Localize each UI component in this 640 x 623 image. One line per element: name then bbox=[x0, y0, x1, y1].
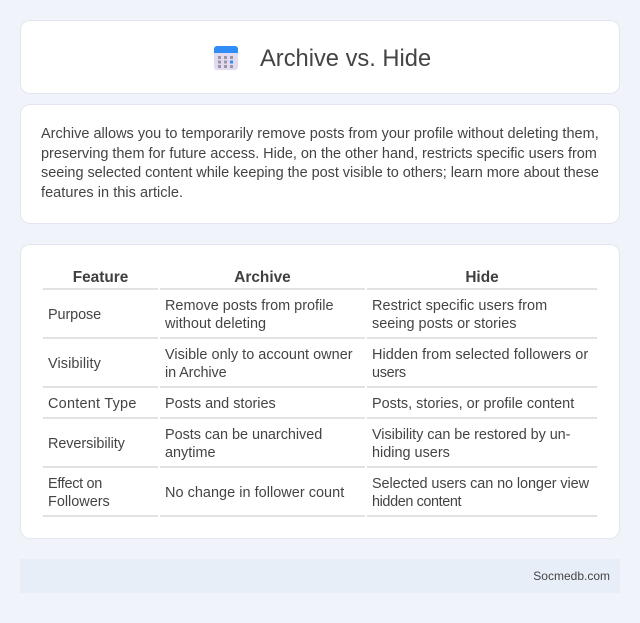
row: purpose: without deleting bbox=[165, 316, 266, 332]
table header: Archive bbox=[234, 269, 291, 286]
row: effect on followers: No change in follower count bbox=[165, 485, 344, 501]
text block: introduction: Archive allows you to temporarily remove posts from your profile without deleting them, bbox=[41, 126, 599, 142]
row: effect on followers bbox=[48, 476, 590, 510]
row: visibility: in Archive bbox=[165, 365, 227, 381]
row: visibility: users bbox=[372, 365, 406, 381]
row: effect on followers: Selected users can no longer view bbox=[372, 476, 589, 492]
row: purpose: Remove posts from profile bbox=[165, 298, 334, 314]
title: Archive vs. Hide bbox=[260, 46, 431, 72]
row: visibility bbox=[48, 347, 588, 381]
row: purpose: Restrict specific users from bbox=[372, 298, 547, 314]
footer bar bbox=[20, 559, 620, 593]
text block: introduction: preserving them for future access. Hide, on the other hand, restricts specific users from bbox=[41, 146, 597, 162]
footer text: Socmedb.com bbox=[533, 569, 610, 583]
text block: introduction bbox=[41, 126, 599, 201]
table header: Hide bbox=[465, 269, 499, 286]
row: content type: Posts and stories bbox=[165, 396, 276, 412]
row: content type: Content Type bbox=[48, 396, 137, 412]
row: reversibility: Posts can be unarchived bbox=[165, 427, 322, 443]
row: effect on followers: Followers bbox=[48, 494, 110, 510]
row: purpose bbox=[48, 298, 547, 332]
row: visibility: Hidden from selected followers or bbox=[372, 347, 588, 363]
panel: title card bbox=[20, 20, 620, 94]
panel: introduction bbox=[20, 104, 620, 224]
row: content type: Posts, stories, or profile content bbox=[372, 396, 574, 412]
row: effect on followers: hidden content bbox=[372, 494, 461, 510]
text block: introduction: features in this article. bbox=[41, 185, 183, 201]
row: visibility: Visible only to account owner bbox=[165, 347, 353, 363]
row: purpose: Purpose bbox=[48, 307, 101, 323]
text block: introduction: seeing selected content while keeping the post visible to others; learn more about these bbox=[41, 165, 599, 181]
row: reversibility: anytime bbox=[165, 445, 216, 461]
row: visibility: Visibility bbox=[48, 356, 101, 372]
row: reversibility: Reversibility bbox=[48, 436, 125, 452]
table header: Feature bbox=[73, 269, 128, 286]
row: purpose: seeing posts or stories bbox=[372, 316, 516, 332]
panel: comparison table bbox=[20, 244, 620, 539]
row: content type bbox=[48, 396, 574, 412]
row: reversibility: Visibility can be restored by un- bbox=[372, 427, 570, 443]
row: effect on followers: Effect on bbox=[48, 476, 102, 492]
row: reversibility: hiding users bbox=[372, 445, 450, 461]
row: reversibility bbox=[48, 427, 570, 461]
icon: calendar bbox=[214, 46, 238, 70]
table header bbox=[73, 269, 499, 286]
